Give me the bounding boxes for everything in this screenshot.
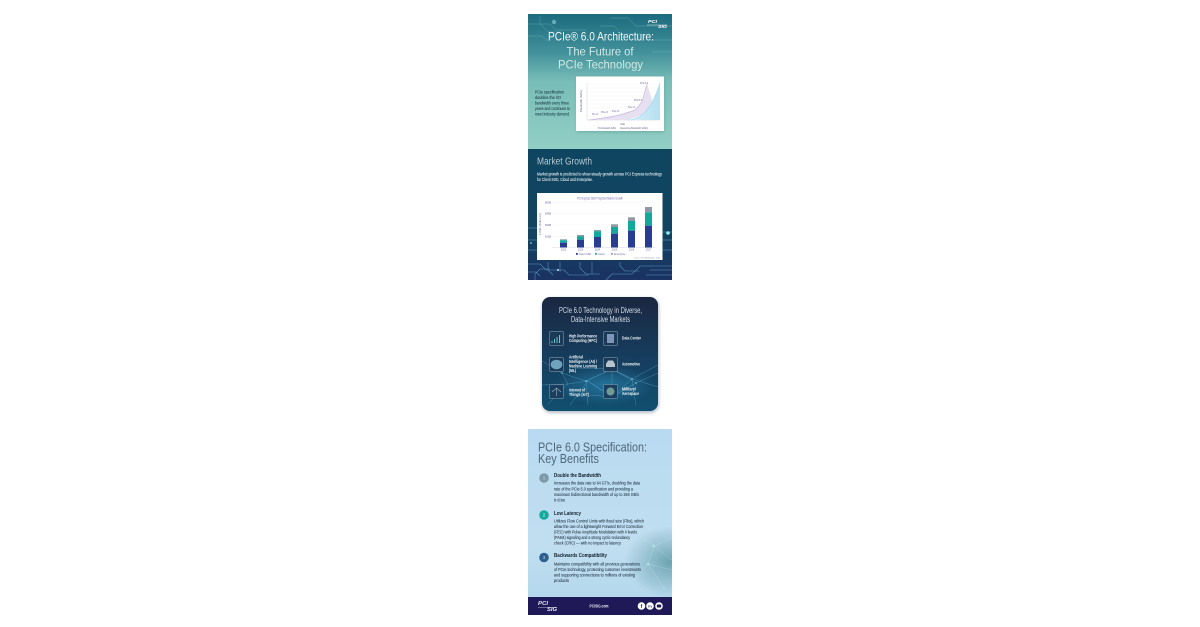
text block: bandwidth statement <box>535 90 570 116</box>
item: automotive: Automotive <box>622 362 640 367</box>
chart: bandwidth growth: Networking Bandwidth (GB/s) <box>620 127 648 130</box>
item: military and aerospace: Military/ <box>622 386 637 392</box>
item: IoT: Internet of <box>569 388 585 392</box>
heading: main title: The Future of <box>566 44 634 58</box>
item: IoT <box>550 384 589 398</box>
benefit: low latency: allow the use of a lightweight Forward Error Correction <box>554 524 643 529</box>
benefit: double the bandwidth: Increases the data rate to 64 GT/s, doubling the data <box>554 480 640 486</box>
chart: bandwidth growth: PCIe 4.0 <box>628 106 635 109</box>
heading: key benefits: Key Benefits <box>538 451 599 466</box>
benefit: low latency: (PAM4) signaling and a strong cyclic redundancy <box>554 535 631 540</box>
heading: diverse markets: Data-Intensive Markets <box>571 315 630 324</box>
icons: social media: in <box>648 604 652 609</box>
item: data center: Data Center <box>622 336 641 341</box>
benefit: double the bandwidth: Double the Bandwidth <box>554 473 601 479</box>
decoration: data network <box>542 361 658 405</box>
benefit: backwards compatibility: 3 <box>543 555 546 560</box>
heading: main title: PCIe Technology <box>558 58 643 72</box>
chart: bandwidth growth: PCIe 5.0 <box>634 99 643 102</box>
text block: bandwidth statement: meet industry demand. <box>535 112 570 116</box>
benefit: backwards compatibility: and supporting connections to millions of existing <box>554 572 635 577</box>
benefit: backwards compatibility <box>539 553 642 583</box>
item: AI and ML: Intelligence (AI) / <box>569 359 598 364</box>
benefit: low latency: Low Latency <box>554 511 581 517</box>
item: AI and ML <box>550 354 598 373</box>
benefit: low latency: check (CRC) — with no impact to latency <box>554 540 622 546</box>
benefit: double the bandwidth: 1 <box>543 476 546 481</box>
heading: key benefits: PCIe 6.0 Specification: <box>538 440 647 454</box>
logo: PCI-SIG: SIG <box>658 24 668 29</box>
chart: projected market growth bars: $30B <box>545 223 551 227</box>
chart: projected market growth bars: 2022 <box>561 248 567 252</box>
chart: projected market growth bars: 2027 <box>646 248 652 252</box>
item: AI and ML: Machine Learning <box>569 364 597 368</box>
chart: projected market growth bars: PCI Express SSD Projected Market Growth <box>577 196 623 200</box>
chart: projected market growth bars: Enterprise <box>614 253 626 256</box>
heading: key benefits <box>538 440 647 466</box>
item: IoT: Things (IoT) <box>569 392 589 397</box>
benefit: low latency: 2 <box>543 513 546 518</box>
text block: bandwidth statement: years and continues to <box>535 106 570 111</box>
logo: PCI-SIG <box>647 19 668 29</box>
chart: bandwidth growth: PCIe 3.0 <box>612 110 619 113</box>
footer <box>528 597 672 615</box>
logo: PCI-SIG: PCI <box>648 19 658 24</box>
benefit: backwards compatibility: Backwards Compatibility <box>554 553 607 559</box>
chart: bandwidth growth: Years <box>620 123 626 126</box>
benefit: low latency: Utilizes Flow Control Units with fixed size (Flits), which <box>554 518 644 524</box>
chart: projected market growth bars: Client SSD <box>579 253 591 256</box>
chart: bandwidth growth: PCIe 1.0 <box>592 113 598 116</box>
chart: bandwidth growth: PCIe Bandwidth (GB/s) <box>598 127 616 130</box>
decoration: circuit board traces <box>528 228 672 280</box>
item: AI and ML: (ML) <box>569 368 576 373</box>
link: website: PCISIG.com <box>590 604 608 609</box>
decoration: network nodes <box>629 530 672 594</box>
chart: projected market growth bars: 2025 <box>612 248 618 252</box>
item: HPC: Computing (HPC) <box>569 338 597 343</box>
benefit: double the bandwidth: for x16 lanes <box>554 497 565 502</box>
item: AI and ML: Artificial <box>569 354 583 360</box>
text block: bandwidth statement: PCIe specification <box>535 90 564 94</box>
chart: projected market growth bars: 2023 <box>578 248 584 252</box>
icons: social media: f <box>641 604 643 610</box>
benefit: backwards compatibility: of PCIe technology, protecting customer investments <box>554 567 642 572</box>
chart: projected market growth bars: $45B <box>545 212 551 216</box>
item: HPC <box>550 332 597 346</box>
heading: Market Growth: Market Growth <box>537 156 592 168</box>
chart: projected market growth bars: 2026 <box>629 248 635 252</box>
benefit: low latency: (FEC) with Pulse Amplitude Modulation with 4 levels <box>554 529 638 534</box>
text block: market summary: for Client SSD, Cloud and Enterprise. <box>537 177 593 182</box>
item: HPC: High Performance <box>569 334 597 338</box>
panel: header and bandwidth <box>528 14 672 149</box>
panel: market growth <box>528 149 672 280</box>
heading: main title: PCIe® 6.0 Architecture: <box>548 30 654 44</box>
item: military and aerospace <box>604 384 639 398</box>
benefit: low latency <box>539 510 644 546</box>
text block: market summary <box>537 172 663 182</box>
chart: projected market growth bars: $60B <box>545 200 551 204</box>
logo: PCI-SIG footer: SIG <box>547 607 557 613</box>
chart: bandwidth growth <box>576 76 664 132</box>
heading: main title <box>548 30 654 72</box>
benefit: double the bandwidth: maximum bidirectional bandwidth of up to 256 GB/s <box>554 492 640 497</box>
chart: bandwidth growth: PCIe 2.0 <box>601 111 608 114</box>
logo: PCI-SIG footer <box>538 601 557 613</box>
text block: market summary: Market growth is predicted to show steady growth across PCI Express technology <box>537 172 663 176</box>
benefit: backwards compatibility: Maintains compatibility with all previous generations <box>554 561 641 566</box>
icons: social media <box>638 602 663 610</box>
benefit: double the bandwidth <box>539 473 640 502</box>
chart: projected market growth bars <box>537 193 662 260</box>
logo: PCI-SIG footer: PCI <box>538 601 549 607</box>
chart: projected market growth bars: 2024 <box>595 248 601 252</box>
item: military and aerospace: Aerospace <box>622 391 639 396</box>
chart: projected market growth bars: $15B <box>545 234 551 238</box>
panel: diverse markets card <box>542 297 659 413</box>
heading: diverse markets: PCIe 6.0 Technology in Diverse, <box>559 306 642 315</box>
chart: projected market growth bars: Cloud <box>598 253 605 256</box>
benefit: double the bandwidth: rate of the PCIe 5.0 specification and providing a <box>554 486 633 491</box>
text block: bandwidth statement: bandwidth every three <box>535 100 569 106</box>
text block: bandwidth statement: doubles the I/O <box>535 95 561 100</box>
panel: key benefits <box>528 429 672 597</box>
chart: bandwidth growth: PCIe 6.0 <box>640 82 649 85</box>
heading: diverse markets <box>559 306 642 324</box>
chart: bandwidth growth: Bandwidth (GB/s) <box>580 90 583 112</box>
chart: projected market growth bars: USD (Billions) <box>538 213 542 235</box>
chart: projected market growth bars: Source: PCI-SIG Analysis, 2023 <box>635 257 660 260</box>
benefit: backwards compatibility: products <box>554 578 570 583</box>
